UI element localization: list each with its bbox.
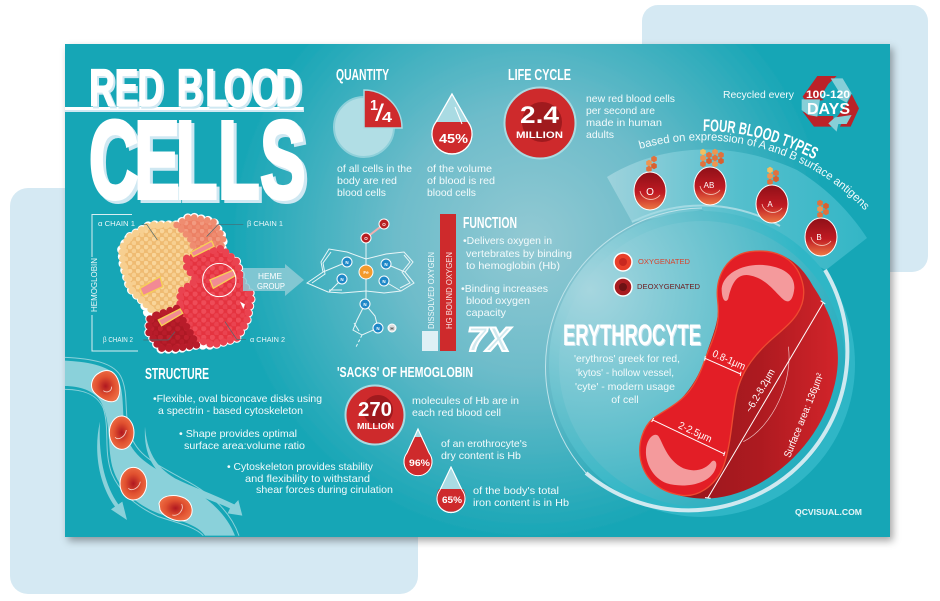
panel: life cycle — [504, 67, 859, 158]
text: function bullets: capacity — [466, 307, 507, 319]
arrow: heme group: GROUP — [257, 282, 285, 291]
pie chart: one quarter — [334, 90, 402, 157]
heme molecule diagram: N — [345, 260, 349, 265]
heme molecule diagram: N — [376, 326, 380, 331]
hemoglobin chain labels: α CHAIN 1 — [98, 219, 135, 228]
drop: 65 percent — [436, 467, 465, 513]
panel: quantity — [334, 67, 495, 199]
blood type A — [756, 167, 788, 223]
text: structure bullets: •Flexible, oval biconcave disks using — [153, 393, 322, 405]
text: function bullets: to hemoglobin (Hb) — [466, 260, 560, 272]
disc — [559, 221, 845, 507]
text: dry content: of an erothrocyte's — [441, 438, 527, 450]
bar labels: DISSOLVED OXYGEN — [427, 252, 436, 329]
drop: 45 percent: 45% — [439, 131, 468, 146]
text: erythrocyte etymology: 'kytos' - hollow vessel, — [576, 367, 674, 379]
text: erythrocyte etymology — [574, 353, 680, 406]
text: molecules of Hb: molecules of Hb are in — [412, 395, 519, 407]
subheading: based on expression: based on expression of A and B surface antigens — [638, 134, 868, 210]
dimple line — [743, 347, 789, 442]
text: erythrocyte etymology: of cell — [611, 394, 639, 406]
illustration: red blood cell cross-section — [640, 251, 838, 499]
pale outer band — [586, 270, 847, 510]
text: volume of blood: of the volume — [427, 163, 492, 175]
heading: structure: STRUCTURE — [145, 366, 209, 383]
text: structure bullets: and flexibility to withstand — [245, 473, 370, 485]
icon: recycle 100-120 days: 100-120 — [806, 89, 850, 101]
legend: deoxygenated: DEOXYGENATED — [637, 282, 701, 291]
bar: dissolved oxygen — [422, 331, 438, 351]
bar: Hb bound oxygen — [440, 214, 456, 351]
blood type O — [634, 156, 666, 210]
heme molecule diagram: N — [384, 262, 388, 267]
text: volume of blood: of blood is red — [427, 175, 495, 187]
text: erythrocyte etymology: 'cyte' - modern usage — [575, 381, 675, 393]
stat circle: 270 million: 270 — [358, 399, 392, 421]
text: iron content: iron content is in Hb — [473, 497, 569, 509]
icon: recycle 100-120 days — [802, 76, 859, 132]
drop: 45 percent — [432, 94, 472, 154]
text: structure bullets: shear forces during cirulation — [256, 484, 393, 496]
bar labels: HG BOUND OXYGEN — [445, 252, 454, 329]
text: recycled every: Recycled every — [723, 89, 795, 101]
panel: vessel with flowing cells — [65, 357, 242, 536]
stat circle: 2.4 million: 2.4 — [520, 102, 560, 129]
fan band behind disc — [607, 150, 867, 270]
disc ring — [549, 211, 855, 517]
text: erythrocyte etymology: 'erythros' greek for red, — [574, 353, 680, 365]
title: RED BLOOD — [91, 60, 303, 120]
bracket and hemoglobin label: HEMOGLOBIN — [90, 258, 99, 312]
blood type B — [805, 200, 837, 256]
heading: four blood types: FOUR BLOOD TYPES — [704, 119, 818, 158]
blood type B: B — [816, 233, 822, 242]
hemoglobin chain labels: β CHAIN 2 — [103, 335, 133, 344]
arrow right — [145, 427, 242, 516]
dimension labels: 0.8-1μm — [710, 349, 747, 373]
text: dry content: dry content is Hb — [441, 450, 521, 462]
panel: structure — [145, 366, 393, 496]
text: molecules of Hb: each red blood cell — [412, 407, 501, 419]
title: RED BLOOD — [89, 58, 301, 118]
dimension labels: 2-2.5μm — [676, 420, 713, 445]
arrow left — [97, 422, 127, 520]
text: dry content — [441, 438, 527, 462]
thin ring upper left — [545, 208, 702, 473]
text: function bullets: vertebrates by binding — [466, 248, 572, 260]
text: new red blood cells — [586, 93, 675, 141]
arrow: heme group: HEME — [258, 272, 282, 281]
heme molecule diagram — [307, 219, 414, 347]
text: iron content — [473, 485, 569, 509]
heme molecule diagram: O — [382, 222, 386, 227]
bar chart: oxygen capacity — [422, 214, 512, 359]
blood type AB: AB — [704, 181, 714, 190]
dimension labels: ~6.2-8.2μm — [744, 367, 778, 415]
main teal panel — [65, 44, 890, 537]
vessel ribbon — [65, 361, 235, 536]
text: all cells: blood cells — [337, 187, 386, 199]
pie chart: one quarter: 4 — [382, 109, 393, 126]
text: molecules of Hb — [412, 395, 519, 419]
title: CELLS — [89, 99, 306, 222]
text: structure bullets: surface area:volume ratio — [184, 440, 305, 452]
text: new red blood cells: adults — [586, 129, 614, 141]
blood type AB — [694, 149, 726, 205]
text: new red blood cells: per second are — [586, 105, 655, 117]
heading: sacks of hemoglobin: 'SACKS' OF HEMOGLOBIN — [337, 364, 473, 381]
text: all cells: body are red — [337, 175, 397, 187]
pie chart: one quarter: 1 — [370, 97, 378, 114]
heading: function: FUNCTION — [463, 215, 517, 232]
legend: deoxygenated — [614, 278, 701, 296]
panel: erythrocyte disc and fan — [545, 150, 867, 517]
dimension lines — [652, 301, 825, 498]
heme molecule diagram: H — [390, 326, 394, 331]
pie chart: one quarter: / — [375, 100, 384, 127]
text: function bullets: blood oxygen — [466, 295, 530, 307]
hemoglobin chain labels — [98, 219, 285, 344]
panel: hemoglobin — [90, 214, 414, 351]
dimension labels: Surface area: 136μm² — [783, 371, 827, 459]
protein molecule — [122, 217, 252, 349]
vessel outlines — [65, 357, 239, 536]
stat circle: 2.4 million — [504, 88, 576, 158]
background card: bottom left — [10, 188, 418, 594]
cell back crescent — [640, 251, 838, 499]
text: new red blood cells: new red blood cells — [586, 93, 675, 105]
stat circle: 2.4 million: MILLION — [516, 130, 563, 141]
icon: recycle 100-120 days: DAYS — [807, 101, 850, 118]
heme molecule diagram: N — [382, 279, 386, 284]
title: CELLS — [92, 102, 309, 225]
hemoglobin chain labels: α CHAIN 2 — [250, 335, 285, 344]
text: iron content: of the body's total — [473, 485, 559, 497]
highlight top — [722, 265, 794, 301]
drop: 65 percent: 65% — [442, 495, 462, 505]
bar labels — [427, 252, 454, 329]
drop: 96 percent — [404, 429, 432, 476]
stat circle: 270 million: MILLION — [357, 422, 394, 431]
panel: sacks of hemoglobin — [337, 364, 569, 513]
heme molecule diagram: Fe — [363, 270, 369, 275]
bracket and hemoglobin label — [90, 214, 138, 351]
legend: oxygenated — [614, 253, 691, 271]
text: structure bullets: • Cytoskeleton provides stability — [227, 461, 374, 473]
text: structure bullets: • Shape provides optimal — [179, 428, 297, 440]
text: function bullets: •Binding increases — [461, 283, 548, 295]
legend: oxygenated: OXYGENATED — [638, 257, 691, 266]
title — [65, 58, 309, 225]
heading: quantity: QUANTITY — [336, 67, 389, 84]
panel: function — [461, 215, 572, 319]
text: function bullets — [461, 235, 572, 319]
stat: 7X: 7X — [467, 321, 512, 359]
stat circle: 270 million — [346, 386, 404, 444]
heading: erythrocyte: ERYTHROCYTE — [564, 320, 702, 353]
text: structure bullets: a spectrin - based cytoskeleton — [158, 405, 303, 417]
flow cells — [91, 371, 192, 521]
text: structure bullets — [153, 393, 393, 496]
heme groups — [140, 241, 235, 326]
dimension labels — [676, 349, 827, 459]
heme molecule diagram: N — [340, 277, 344, 282]
highlight bottom — [646, 435, 716, 485]
heading: life cycle: LIFE CYCLE — [508, 67, 571, 84]
heme molecule diagram: N — [363, 302, 367, 307]
blood type A: A — [767, 200, 773, 209]
credit: QCVISUAL.COM — [795, 507, 862, 517]
heading: erythrocyte: ERYTHROCYTE — [563, 319, 701, 352]
heading: erythrocyte — [563, 319, 702, 353]
text: new red blood cells: made in human — [586, 117, 662, 129]
cell front — [640, 251, 804, 496]
text: volume of blood: blood cells — [427, 187, 476, 199]
text: all cells — [337, 163, 412, 199]
leader lines — [142, 224, 246, 340]
blood type O: O — [646, 187, 654, 198]
drop: 96 percent: 96% — [409, 458, 430, 468]
heme molecule diagram: O — [364, 236, 368, 241]
text: function bullets: •Delivers oxygen in — [463, 235, 552, 247]
text: all cells: of all cells in the — [337, 163, 412, 175]
arrow: heme group — [243, 264, 304, 296]
background card: top right — [642, 5, 928, 272]
text: volume of blood — [427, 163, 495, 199]
hemoglobin chain labels: β CHAIN 1 — [247, 219, 283, 228]
